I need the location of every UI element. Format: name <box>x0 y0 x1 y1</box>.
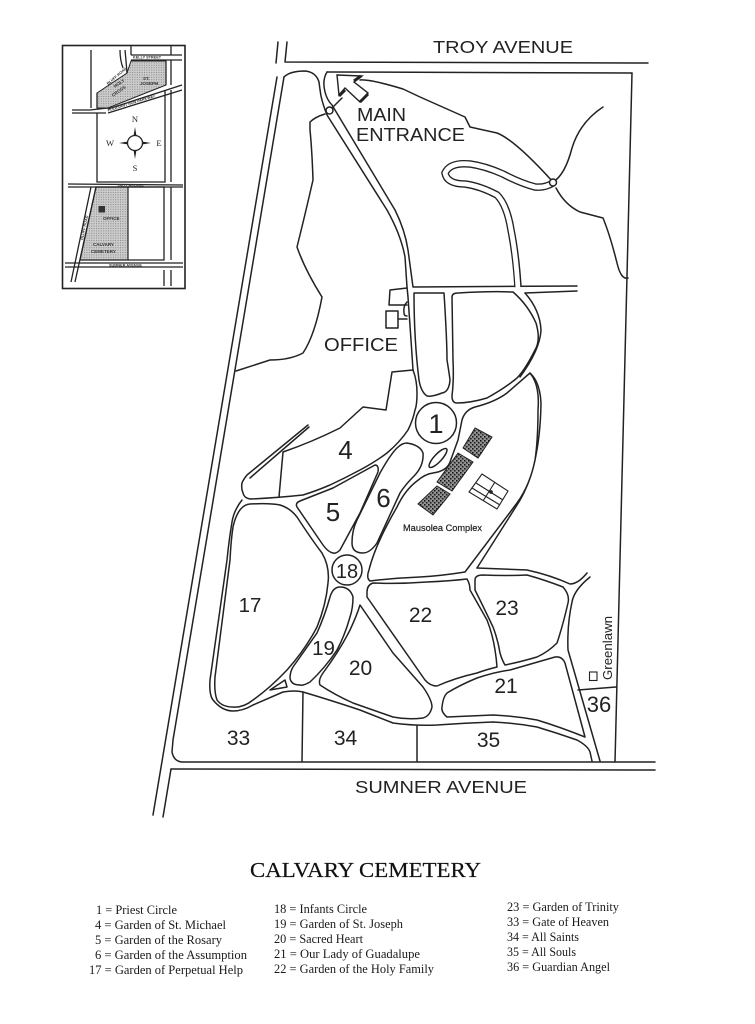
inset: street and area labels: OFFICE <box>103 216 120 221</box>
greenlawn label: Greenlawn <box>600 616 615 680</box>
legend column 1: 4 = Garden of St. Michael <box>95 918 227 932</box>
street heading: Troy Avenue: TROY AVENUE <box>433 37 573 57</box>
legend column 1: 5 = Garden of the Rosary <box>95 933 223 947</box>
mausolea buildings <box>418 428 508 515</box>
inset: street and area labels: CROSS <box>111 85 127 98</box>
section numbers: 23 <box>495 597 519 620</box>
main entrance label: MAIN <box>357 104 406 125</box>
inset: compass rose: N <box>132 114 138 124</box>
legend column 1: 1 = Priest Circle <box>96 903 177 917</box>
inset: compass rose: E <box>156 138 162 148</box>
section numbers: 18 <box>336 561 358 583</box>
section numbers: 21 <box>494 675 518 698</box>
small square marker <box>590 672 597 680</box>
inset: Calvary Cemetery shaded area <box>80 187 128 260</box>
legend column 1 <box>89 903 248 977</box>
section numbers: 6 <box>376 483 391 513</box>
legend column 3: 33 = Gate of Heaven <box>507 915 610 929</box>
inset: Holy Cross and St. Joseph shaded area <box>97 61 166 108</box>
mausolea complex label: Mausolea Complex <box>403 523 483 533</box>
section numbers <box>227 409 611 752</box>
main entrance label second line: ENTRANCE <box>356 124 465 145</box>
legend column 3: 23 = Garden of Trinity <box>507 900 620 914</box>
legend column 1: 17 = Garden of Perpetual Help <box>89 963 243 977</box>
inset: street and area labels: CEMETERY <box>91 249 116 254</box>
office buildings <box>386 288 407 328</box>
inset: street and area labels: CALVARY <box>93 242 114 247</box>
legend column 2 <box>274 902 435 976</box>
inset: street and area labels <box>80 56 162 268</box>
inset: office marker <box>98 206 105 212</box>
streets and property boundary <box>153 42 655 817</box>
inset: street and area labels: ST. <box>143 76 150 81</box>
hook road <box>445 164 553 287</box>
cemetery map <box>153 42 655 817</box>
inset: street grid <box>65 46 183 286</box>
inset: street and area labels: JOSEPH <box>140 81 158 86</box>
stream junction circles <box>326 107 333 114</box>
main entrance arrow <box>337 75 368 102</box>
inset: street and area labels: TROY AVENUE <box>117 184 144 188</box>
legend column 3: 34 = All Saints <box>507 930 579 944</box>
infants circle <box>332 555 362 585</box>
section numbers: 36 <box>587 692 611 717</box>
entrance road and outer curves <box>210 71 616 761</box>
legend column 2: 19 = Garden of St. Joseph <box>274 917 404 931</box>
east stream junction <box>550 179 556 186</box>
legend column 3: 35 = All Souls <box>507 945 576 959</box>
title: CALVARY CEMETERY <box>250 858 481 882</box>
inset: street and area labels: BLUFF ROAD <box>80 215 89 240</box>
section numbers: 5 <box>326 497 340 527</box>
legend column 2: 20 = Sacred Heart <box>274 932 364 946</box>
stream lines <box>236 80 628 371</box>
legend column 3 <box>507 900 620 974</box>
legend column 2: 22 = Garden of the Holy Family <box>274 962 435 976</box>
section numbers: 20 <box>349 657 372 680</box>
inset: street and area labels: SUMNER AVENUE <box>109 264 142 268</box>
street heading: Sumner Avenue: SUMNER AVENUE <box>355 777 527 797</box>
legend column 3: 36 = Guardian Angel <box>507 960 611 974</box>
section numbers: 34 <box>334 727 357 750</box>
office label: OFFICE <box>324 335 398 355</box>
inset: compass rose: S <box>133 163 138 173</box>
section numbers: 33 <box>227 727 250 750</box>
cross-shaped mausoleum <box>469 474 508 509</box>
inset: compass rose: W <box>106 138 114 148</box>
section numbers: 22 <box>409 604 432 627</box>
legend column 2: 21 = Our Lady of Guadalupe <box>274 947 420 961</box>
inset: street and area labels: PLEASANT RUN PARKWAY <box>107 94 156 112</box>
inset: street and area labels: HOLY <box>113 78 125 89</box>
section numbers: 35 <box>477 729 500 752</box>
section numbers: 19 <box>312 637 335 660</box>
section numbers: 4 <box>338 435 353 465</box>
locator inset map <box>62 46 185 288</box>
legend column 2: 18 = Infants Circle <box>274 902 367 916</box>
inset: street and area labels: BLUFF ROAD <box>106 67 128 86</box>
garden islands <box>215 292 585 737</box>
legend column 1: 6 = Garden of the Assumption <box>95 948 248 962</box>
inset: compass rose <box>106 114 162 173</box>
inset: street and area labels: KELLY STREET <box>133 56 162 60</box>
priest circle <box>416 402 456 444</box>
section numbers: 17 <box>239 594 261 617</box>
section numbers: 1 <box>428 409 444 439</box>
